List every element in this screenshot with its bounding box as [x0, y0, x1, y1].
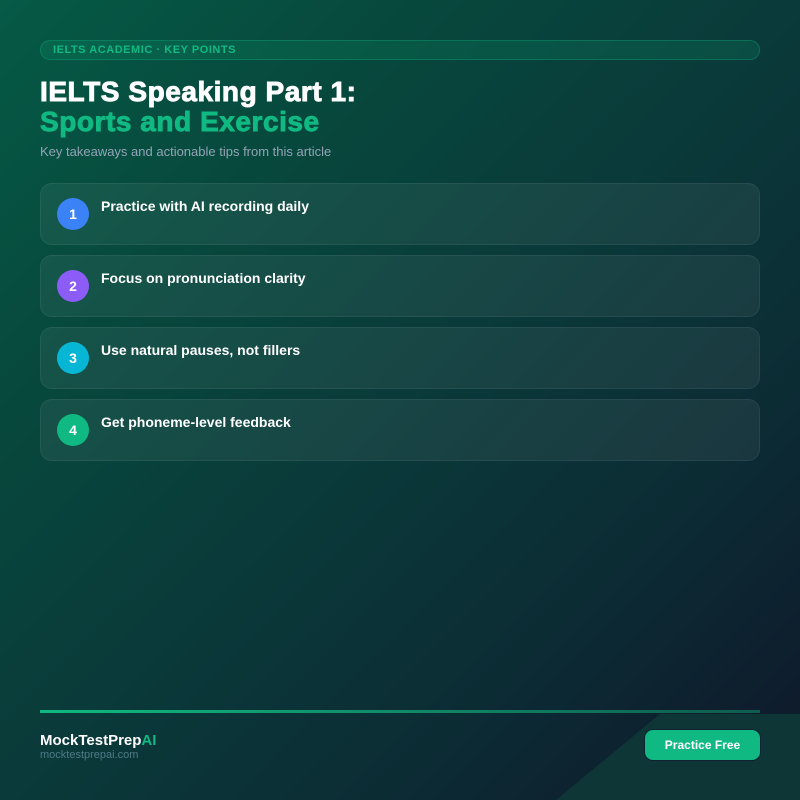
point card 4 — [40, 399, 760, 461]
number badge 3: 3 — [69, 350, 77, 366]
badge — [40, 40, 760, 60]
point card 2 — [40, 255, 760, 317]
point text 4: Get phoneme-level feedback — [101, 414, 291, 430]
number badge 4 — [57, 414, 89, 446]
title: IELTS Speaking Part 1: — [40, 76, 357, 107]
point card 3 — [40, 327, 760, 389]
point text 1: Practice with AI recording daily — [101, 198, 309, 214]
point text 3: Use natural pauses, not fillers — [101, 342, 300, 358]
brand name: MockTestPrepAI — [40, 732, 156, 749]
brand — [40, 732, 156, 761]
point card 1 — [40, 183, 760, 245]
title: Sports and Exercise — [40, 106, 320, 137]
point text 2: Focus on pronunciation clarity — [101, 270, 306, 286]
call to action button: Practice Free — [665, 738, 740, 752]
number badge 2 — [57, 270, 89, 302]
number badge 1 — [57, 198, 89, 230]
brand url: mocktestprepai.com — [40, 749, 138, 761]
number badge 2: 2 — [69, 278, 77, 294]
number badge 1: 1 — [69, 206, 77, 222]
footer accent bar — [40, 710, 760, 713]
subtitle: Key takeaways and actionable tips from this article — [40, 144, 331, 159]
number badge 4: 4 — [69, 422, 77, 438]
call to action button — [645, 730, 760, 760]
title — [40, 76, 357, 138]
badge: IELTS ACADEMIC · KEY POINTS — [53, 44, 236, 56]
number badge 3 — [57, 342, 89, 374]
